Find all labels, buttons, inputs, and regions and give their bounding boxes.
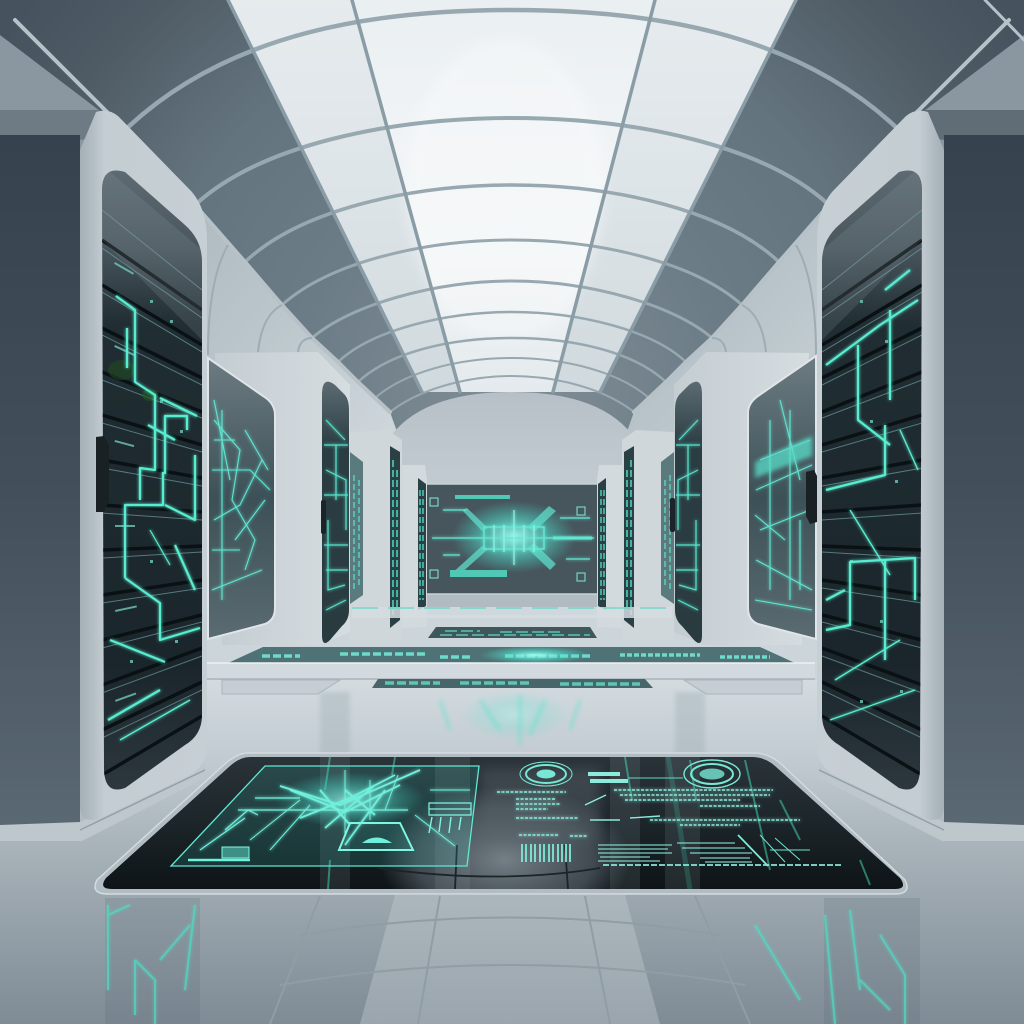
- door handle: [96, 436, 109, 512]
- screen bezel: [95, 753, 907, 894]
- blueprint box: [339, 823, 413, 850]
- screen glow: [452, 501, 576, 573]
- ceiling reflection in glass: [386, 792, 623, 889]
- left large server: [0, 110, 207, 841]
- front frame: [817, 111, 944, 820]
- screen surface: [103, 757, 903, 889]
- far floor band: [200, 615, 824, 685]
- central light panels: [352, 0, 655, 392]
- far servers right: [597, 430, 674, 640]
- ceiling arcs: [125, 10, 899, 412]
- circuit traces: [108, 296, 200, 740]
- right upper wall: [894, 35, 1024, 200]
- rack indicators: [114, 262, 183, 702]
- rack rows: [102, 210, 202, 775]
- right large server: [806, 110, 1024, 841]
- ceiling vault: [0, 0, 1024, 440]
- glass reflection: [822, 165, 922, 340]
- data rows: [497, 790, 800, 836]
- rack indicators: [850, 300, 903, 703]
- floor screen: [94, 752, 908, 895]
- back wall: [388, 392, 636, 640]
- left upper wall: [0, 35, 130, 200]
- longitudinal ribs: [15, 0, 1024, 412]
- glass table far: [352, 607, 672, 638]
- dial right: [684, 760, 740, 788]
- side body: [0, 135, 80, 825]
- dial left: [520, 762, 572, 786]
- x-shaped arms: [450, 506, 556, 576]
- text block: [598, 843, 842, 865]
- side wall arches: [208, 245, 816, 355]
- mid server bases: [222, 680, 802, 694]
- front frame: [80, 111, 207, 820]
- header bars: [588, 772, 628, 783]
- flanking light panels: [228, 0, 796, 392]
- glass reflection: [102, 165, 202, 340]
- mid server left: [208, 352, 350, 645]
- vertical bars: [522, 844, 570, 862]
- side body: [944, 135, 1024, 825]
- circuit traces: [826, 270, 918, 720]
- holographic data: [497, 760, 842, 866]
- mid panel: [208, 358, 275, 639]
- left floor reflection: [105, 898, 200, 1024]
- mid panel: [748, 356, 816, 639]
- left side wall: [125, 130, 400, 440]
- far servers left: [350, 430, 427, 640]
- floor reflections: [320, 690, 705, 756]
- mid server right: [670, 352, 816, 645]
- blueprint grid: [429, 803, 471, 815]
- glass table main: [207, 646, 815, 688]
- central glow: [405, 40, 605, 340]
- blueprint bars: [188, 859, 250, 861]
- vertical green reflections: [325, 757, 870, 889]
- mid server door: [322, 382, 349, 643]
- top face: [916, 110, 1024, 140]
- base: [0, 762, 205, 841]
- rack rows: [822, 210, 922, 775]
- holographic blueprint: [171, 766, 479, 866]
- base: [819, 762, 1024, 841]
- screen: [102, 170, 202, 790]
- screen: [822, 170, 922, 790]
- floor: [0, 680, 1024, 1024]
- mid server door: [675, 382, 702, 643]
- right side wall: [624, 130, 899, 440]
- door handle: [806, 470, 817, 524]
- central wall screen: [426, 484, 598, 594]
- top face: [0, 110, 108, 140]
- right floor reflection: [824, 898, 920, 1024]
- floor ceiling reflection: [105, 895, 920, 1024]
